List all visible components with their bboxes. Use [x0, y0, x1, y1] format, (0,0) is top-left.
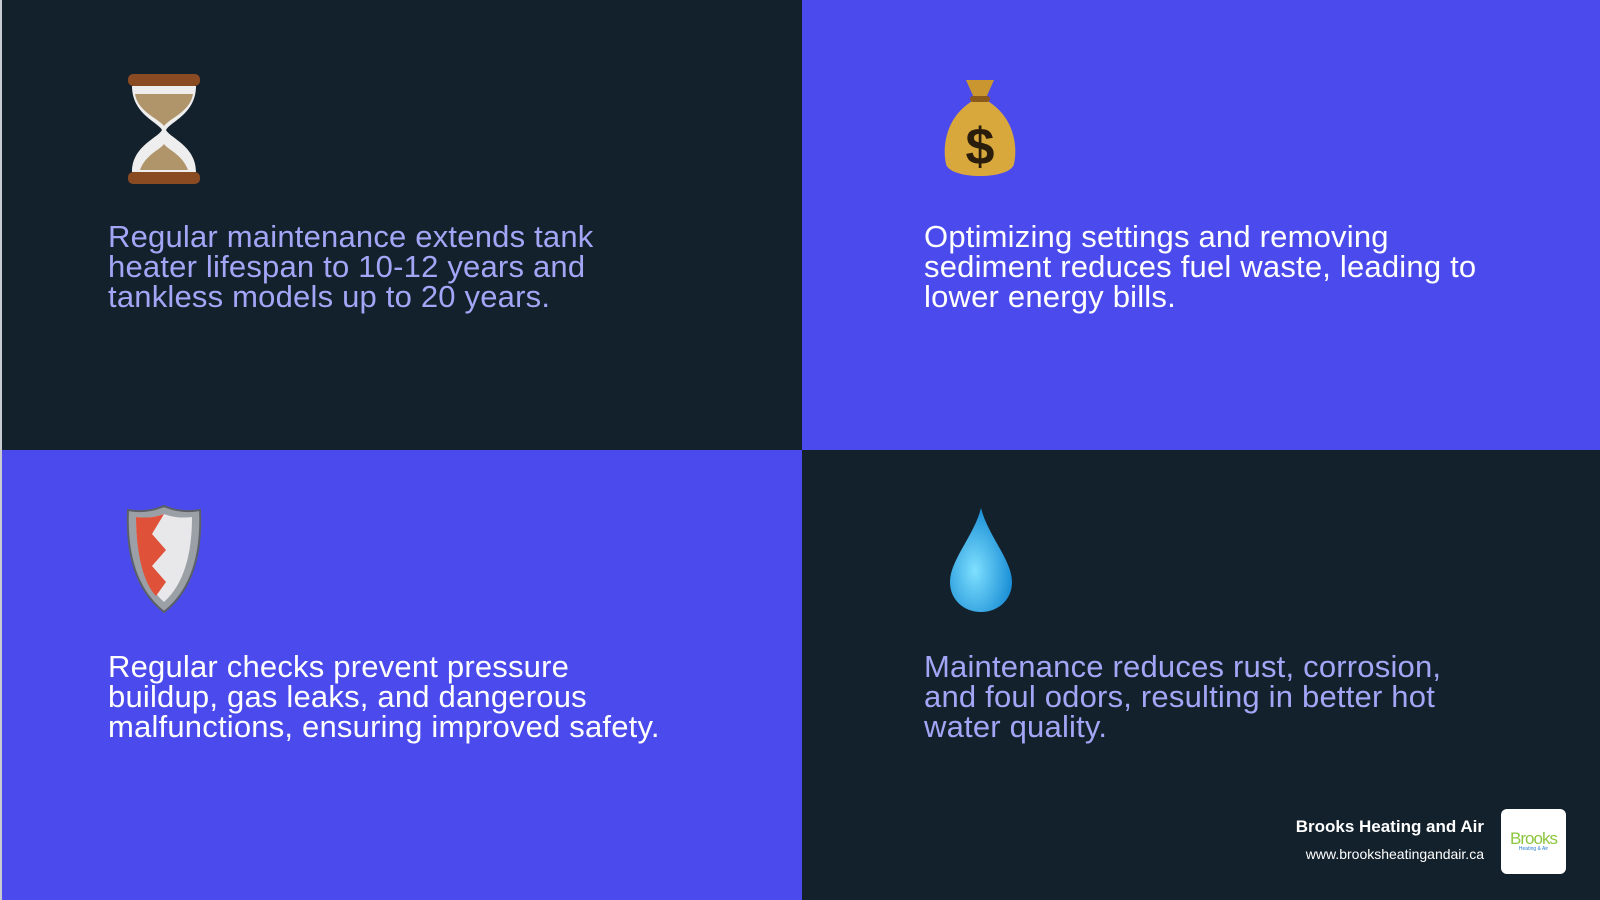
text: energy: sediment reduces fuel waste, leading to [924, 249, 1476, 284]
text: water quality: and foul odors, resulting in better hot [924, 679, 1435, 714]
text: safety: Regular checks prevent pressure [108, 649, 569, 684]
icon: money bag [944, 80, 1016, 176]
logo: Heating & Air [1519, 846, 1548, 852]
panel: energy savings [802, 0, 1600, 450]
text: lifespan: tankless models up to 20 years. [108, 279, 550, 314]
text: safety [108, 649, 660, 744]
panel: water quality [802, 450, 1600, 900]
logo: Brooks [1510, 829, 1557, 848]
website: www.brooksheatingandair.ca [1306, 846, 1484, 862]
icon: hourglass [128, 74, 200, 184]
text: energy: Optimizing settings and removing [924, 219, 1389, 254]
brand block [1296, 809, 1566, 874]
text: energy: lower energy bills. [924, 279, 1176, 314]
text: safety: malfunctions, ensuring improved safety. [108, 709, 660, 744]
text: lifespan [108, 219, 594, 314]
text: lifespan: heater lifespan to 10-12 years and [108, 249, 585, 284]
panel: lifespan [2, 0, 802, 450]
brand name: Brooks Heating and Air [1296, 817, 1484, 836]
text: water quality [924, 649, 1441, 744]
icon: money bag: $ [966, 118, 995, 176]
logo [1501, 809, 1566, 874]
icon: water drop [950, 508, 1012, 612]
text: lifespan: Regular maintenance extends tank [108, 219, 593, 254]
icon: shield [126, 505, 202, 614]
text: water quality: Maintenance reduces rust, corrosion, [924, 649, 1441, 684]
text: water quality: water quality. [924, 709, 1107, 744]
left edge line [0, 0, 2, 900]
text: energy [924, 219, 1476, 314]
text: safety: buildup, gas leaks, and dangerous [108, 679, 587, 714]
panel: safety [2, 450, 802, 900]
